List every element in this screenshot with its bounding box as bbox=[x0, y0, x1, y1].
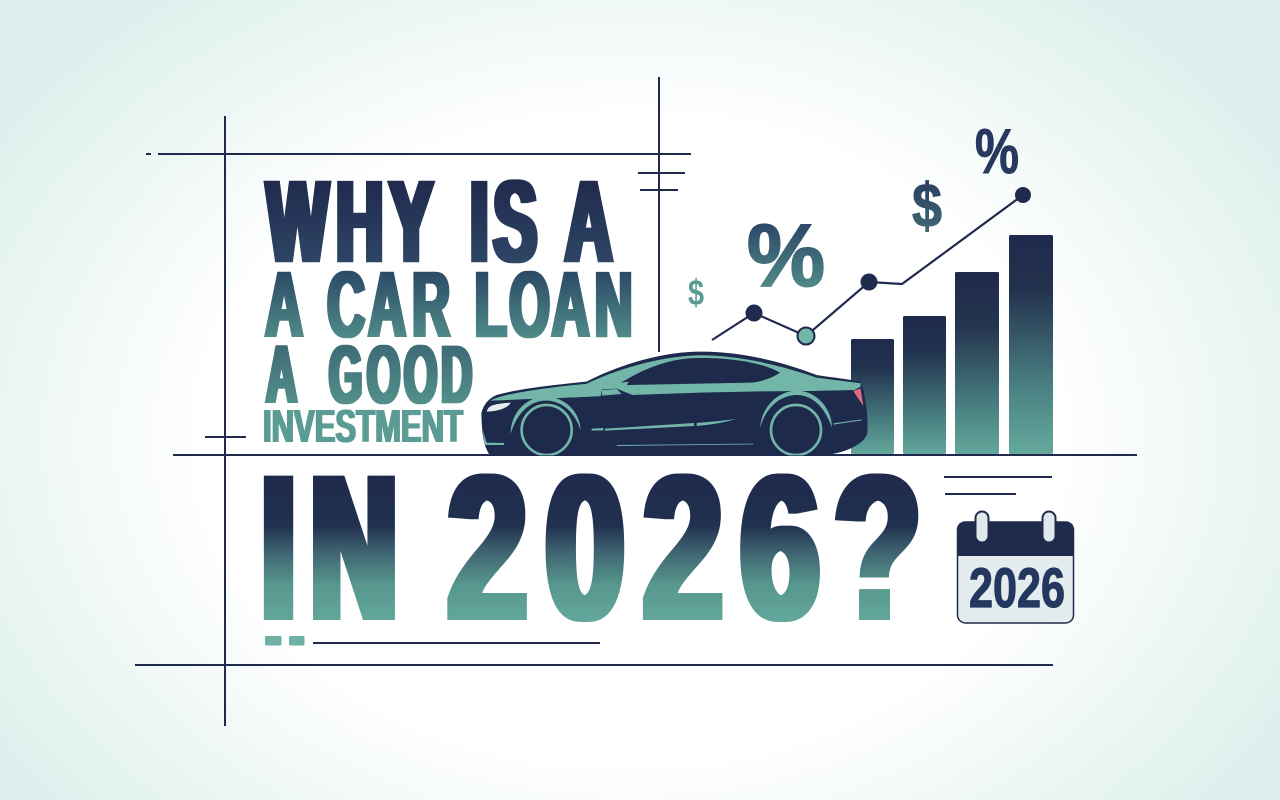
wheel arches bbox=[511, 391, 832, 434]
title: why is a car loan a good investment: A CAR LOAN bbox=[265, 252, 632, 356]
note lines above calendar bbox=[944, 477, 1052, 494]
wheels bbox=[522, 405, 821, 455]
headlight bbox=[487, 403, 511, 412]
icon: top percent: % bbox=[975, 117, 1019, 187]
title: why is a car loan a good investment: WHY IS A bbox=[267, 156, 612, 286]
title: in 2026?: IN bbox=[262, 434, 397, 662]
icon: medium dollar: $ bbox=[912, 172, 942, 241]
title: why is a car loan a good investment: INVESTMENT bbox=[263, 400, 463, 452]
line chart bbox=[712, 187, 1031, 344]
icon: small dollar: $ bbox=[688, 272, 704, 313]
icon: calendar 2026 bbox=[957, 512, 1074, 623]
title: why is a car loan a good investment: A GOOD bbox=[266, 328, 472, 420]
tail light bbox=[853, 389, 863, 406]
icon: large percent: % bbox=[747, 206, 825, 305]
side trim lines bbox=[483, 419, 862, 446]
accent squares and underline bbox=[265, 636, 600, 646]
title: in 2026?: 2026? bbox=[448, 435, 921, 662]
bar chart bbox=[851, 235, 1053, 454]
frame lines bbox=[135, 77, 1137, 726]
car silhouette bbox=[481, 352, 868, 455]
title: why is a car loan a good investment bbox=[263, 156, 632, 452]
icon: calendar 2026: 2026 bbox=[969, 556, 1065, 619]
